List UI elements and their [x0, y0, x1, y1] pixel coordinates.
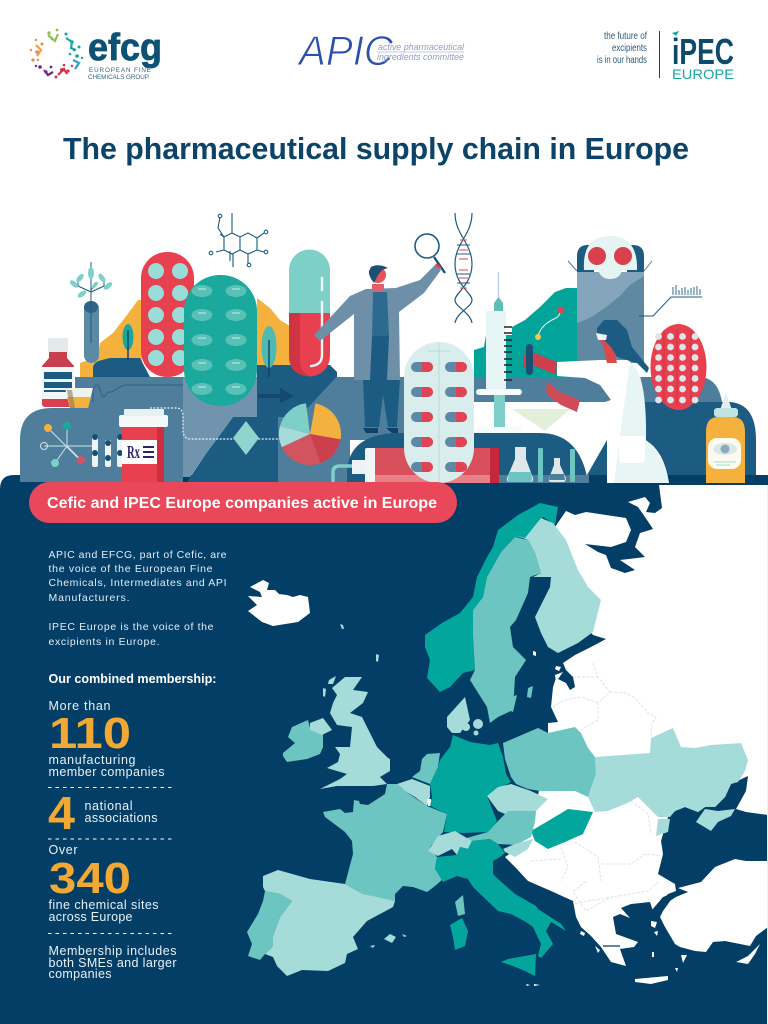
- woman's hair: [597, 320, 649, 373]
- Sweden: [470, 537, 541, 723]
- right edge line: [766, 485, 768, 1024]
- text block: membership note: both SMEs and larger: [48, 956, 176, 970]
- dark ground right of centre: [187, 365, 337, 482]
- slate base, left: [20, 377, 183, 482]
- robot head: [568, 236, 652, 279]
- Gulf of Corinth: [603, 945, 620, 947]
- text block: membership note: Membership includes: [48, 944, 176, 958]
- squiggle: [93, 385, 183, 402]
- lab flasks: [507, 447, 575, 482]
- Scottish islands: [323, 676, 336, 697]
- number 340: 340: [49, 854, 131, 903]
- Italy: [435, 839, 566, 958]
- DNA helix: [455, 213, 472, 323]
- dark mound right: [587, 402, 756, 475]
- man's head: [370, 267, 386, 283]
- large capsule: [289, 250, 330, 376]
- Northern Ireland: [310, 718, 332, 735]
- Iceland: [248, 580, 310, 626]
- stat: 110 manufacturing member companies: [48, 699, 164, 779]
- Sardinia: [450, 918, 468, 950]
- Corsica: [455, 895, 465, 916]
- Faroe and Shetland islands: [340, 624, 379, 662]
- APIC strapline: ingredients committee: [377, 52, 464, 62]
- heading: our combined membership: Our combined membership:: [48, 672, 217, 686]
- woman's face: [597, 337, 617, 363]
- woman's upper glove and test tube: [523, 352, 557, 375]
- magnifying glass: [415, 234, 445, 273]
- woman's goggles: [596, 333, 607, 340]
- APIC strapline: active pharmaceutical: [378, 42, 465, 52]
- man's coat: [314, 264, 441, 380]
- non-member land: Russia and eastern Europe: [505, 485, 768, 966]
- stat: 4 national associations: national: [84, 799, 132, 813]
- Ukraine Odesa coast: [656, 819, 670, 836]
- Sea of Marmara: [652, 891, 688, 912]
- stat: 110 manufacturing member companies: manufacturing: [48, 753, 136, 767]
- central capsule blister pack: [404, 342, 474, 483]
- Crimea: [696, 809, 735, 831]
- map of Europe: [247, 485, 768, 1024]
- title: The pharmaceutical supply chain in Europe: [63, 131, 689, 166]
- slate shelf in front of flasks: [499, 475, 589, 483]
- molecule dots on teal hill: [535, 307, 564, 340]
- Gotland and Oland: [511, 686, 533, 712]
- IPEC tagline: [597, 30, 647, 66]
- IPEC wordmark: iPEC: [672, 31, 734, 72]
- teal blister pack: [184, 275, 257, 406]
- country borders on non-member land: [531, 663, 661, 911]
- efcg strapline: EUROPEAN FINE: [89, 67, 151, 74]
- number 110: 110: [49, 709, 131, 758]
- pie chart: [279, 403, 341, 465]
- text block: intro: Chemicals, Intermediates and API: [48, 577, 226, 589]
- woman's coat: [557, 360, 669, 483]
- scientific network diagram: [40, 422, 92, 467]
- logo: APIC: [296, 27, 465, 74]
- banner heading: [29, 482, 457, 523]
- small dark hill: [93, 358, 150, 377]
- logo: IPEC Europe: [597, 30, 734, 82]
- text block: intro: the voice of the European Fine: [48, 563, 213, 575]
- slate shelf right: [474, 377, 722, 402]
- illustration: pharmaceutical supply chain scene: [20, 213, 756, 483]
- efcg strapline: [88, 67, 151, 81]
- stat: 340 fine chemical sites: across Europe: [48, 910, 133, 924]
- eye-drop bottle: [706, 393, 745, 483]
- scientist: woman in lab coat: [523, 320, 669, 483]
- red dotted pill pack: [650, 324, 706, 410]
- text block: intro: Manufacturers.: [48, 592, 130, 604]
- stat: 340 fine chemical sites: fine chemical sites: [48, 898, 158, 912]
- slate block under the man: [278, 377, 410, 482]
- Czech Republic: [487, 784, 548, 816]
- ointment tube: [333, 448, 499, 483]
- Rx bottle: [119, 409, 168, 483]
- Switzerland: [428, 831, 472, 856]
- logo: EFCG: [30, 27, 162, 81]
- Ukraine: [588, 728, 748, 817]
- dotted flow line: [150, 408, 293, 439]
- stat: 4 national associations: associations: [84, 811, 158, 825]
- Sicily: [501, 954, 536, 976]
- test tube with plant: [69, 262, 113, 363]
- Ireland: [283, 720, 323, 762]
- efcg wordmark: efcg: [88, 27, 162, 69]
- France: [323, 784, 447, 901]
- Belgium: [397, 779, 430, 806]
- Luxembourg: [427, 799, 432, 806]
- United Kingdom: [320, 677, 390, 789]
- non-member land: Turkey: [660, 859, 768, 952]
- mini spike chart: [639, 285, 702, 316]
- Rx label text: Rx: [127, 442, 140, 462]
- text block: membership note: [48, 944, 176, 981]
- number 4: 4: [48, 787, 75, 839]
- banner text: Cefic and IPEC Europe companies active in Europe: [47, 495, 437, 512]
- stat: 340 fine chemical sites: Over: [48, 843, 78, 857]
- text block: membership note: companies: [48, 967, 112, 981]
- molecule: [209, 213, 268, 267]
- woman's lower glove: [546, 384, 580, 412]
- teal stepped hill: [474, 288, 577, 377]
- IPEC tagline: the future of: [604, 30, 647, 42]
- trees: [122, 324, 276, 377]
- vial rods: [92, 434, 123, 467]
- Aland and Estonian islands: [533, 651, 563, 682]
- stat: 110 manufacturing member companies: member companies: [48, 765, 164, 779]
- syrup bottle: [42, 338, 74, 407]
- Netherlands: [412, 753, 440, 784]
- man's trousers: [363, 378, 400, 427]
- Hungary: [531, 809, 593, 849]
- arrow: [258, 388, 294, 403]
- dark mound behind tube and flasks: [347, 433, 588, 482]
- scientist: man with magnifier: [314, 264, 441, 433]
- logo: APIC: APIC: [296, 27, 394, 74]
- Greek and Mediterranean islands: [526, 921, 760, 986]
- text block: intro: APIC and EFCG, part of Cefic, are: [48, 549, 227, 561]
- IPEC tagline: excipients: [612, 42, 647, 54]
- stat: 340 fine chemical sites: [48, 843, 158, 924]
- EUROPE wordmark: EUROPE: [672, 66, 734, 82]
- Germany: [430, 735, 511, 833]
- Portugal: [247, 891, 292, 960]
- Finland: [515, 518, 601, 653]
- stat: 4 national associations: [48, 787, 158, 839]
- text block: intro: [48, 549, 227, 648]
- red blister pack: [141, 252, 194, 377]
- measuring cup: [65, 388, 93, 408]
- APIC strapline: [377, 42, 465, 62]
- grey stepped block: [577, 272, 644, 363]
- Austria: [463, 811, 536, 845]
- stat: 110 manufacturing member companies: More than: [48, 699, 111, 713]
- panel: navy background: [0, 475, 768, 1024]
- IPEC tagline: is in our hands: [597, 54, 647, 66]
- efcg strapline: CHEMICALS GROUP: [88, 74, 149, 81]
- syringe: [476, 272, 522, 433]
- Poland: [503, 727, 596, 797]
- text block: intro: excipients in Europe.: [48, 636, 160, 648]
- Slovenia: [503, 839, 533, 857]
- Spain: [263, 870, 395, 976]
- Norway: [425, 503, 558, 692]
- text block: intro: IPEC Europe is the voice of the: [48, 621, 214, 633]
- diamond: [233, 421, 259, 455]
- Denmark: [447, 697, 483, 736]
- light slate stair column: [183, 377, 257, 477]
- orange mountain: [80, 298, 290, 377]
- Balearic islands: [370, 934, 407, 948]
- paper sheet: [512, 409, 570, 431]
